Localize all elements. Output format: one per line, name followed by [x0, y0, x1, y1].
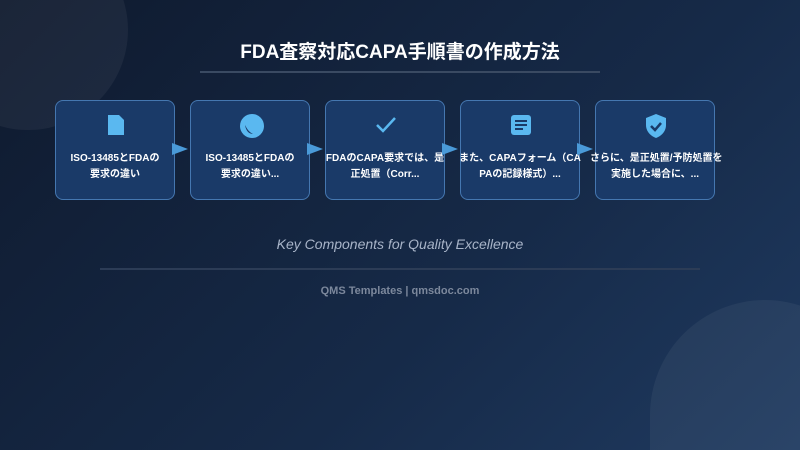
card 5: さらに、是正処置/予防処置を [590, 153, 722, 164]
card 5 [595, 100, 715, 200]
card 4: PAの記録様式）... [479, 169, 561, 180]
card 1: 要求の違い [90, 169, 140, 180]
card 5: 実施した場合に、... [611, 169, 699, 180]
arrow 4 [577, 143, 593, 155]
card 4: また、CAPAフォーム（CA [459, 153, 581, 164]
arrow 2 [307, 143, 323, 155]
card 2 [190, 100, 310, 200]
card 2: ISO-13485とFDAの [206, 153, 294, 164]
card 3 [325, 100, 445, 200]
arrow 3 [442, 143, 458, 155]
card 1: ISO-13485とFDAの [71, 153, 159, 164]
card 3: 正処置（Corr... [351, 169, 419, 180]
title: FDA査察対応CAPA手順書の作成方法 [240, 42, 560, 63]
arrow 1 [172, 143, 188, 155]
subtitle: Key Components for Quality Excellence [277, 236, 523, 252]
footer: QMS Templates | qmsdoc.com [321, 285, 479, 297]
icon: form [511, 115, 531, 135]
card 2: 要求の違い... [221, 169, 279, 180]
card 3: FDAのCAPA要求では、是 [326, 153, 444, 164]
card 4 [460, 100, 580, 200]
icon: circle [240, 114, 264, 138]
card 1 [55, 100, 175, 200]
icon: shield [646, 114, 666, 138]
icon: document [108, 115, 124, 135]
icon: check [376, 117, 396, 133]
